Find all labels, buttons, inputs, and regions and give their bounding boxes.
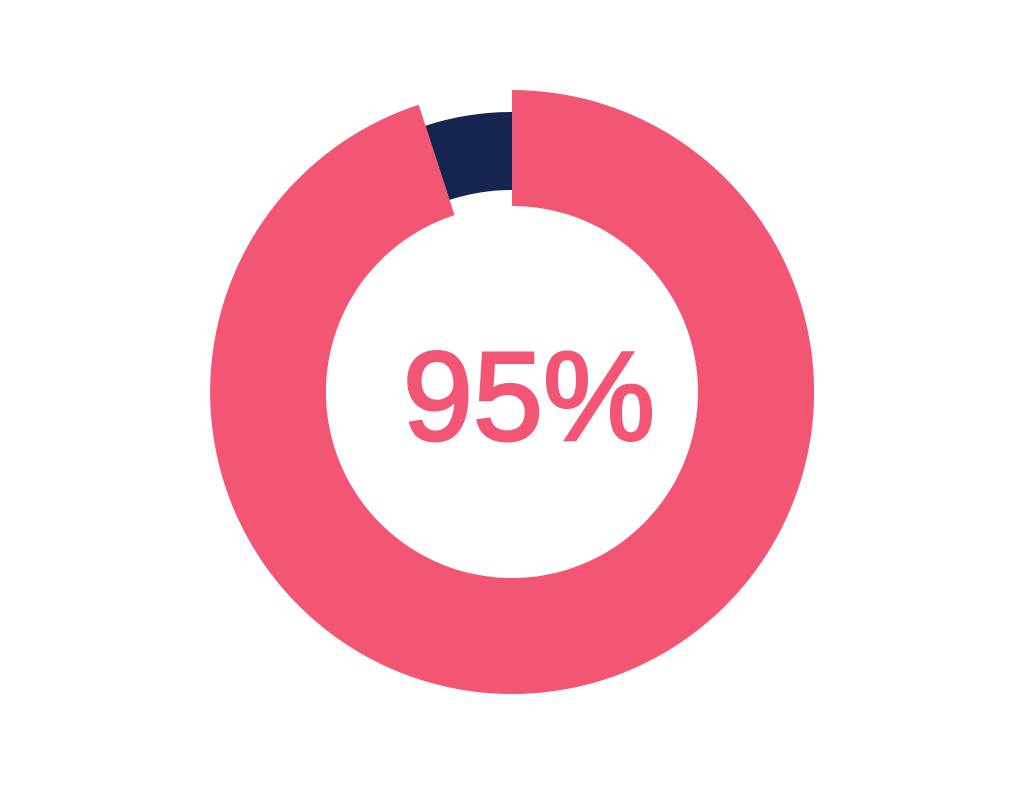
center label: 95%: 95% bbox=[403, 326, 655, 467]
segment: 95% pink bbox=[210, 90, 814, 694]
segment: 5% navy bbox=[426, 112, 512, 200]
